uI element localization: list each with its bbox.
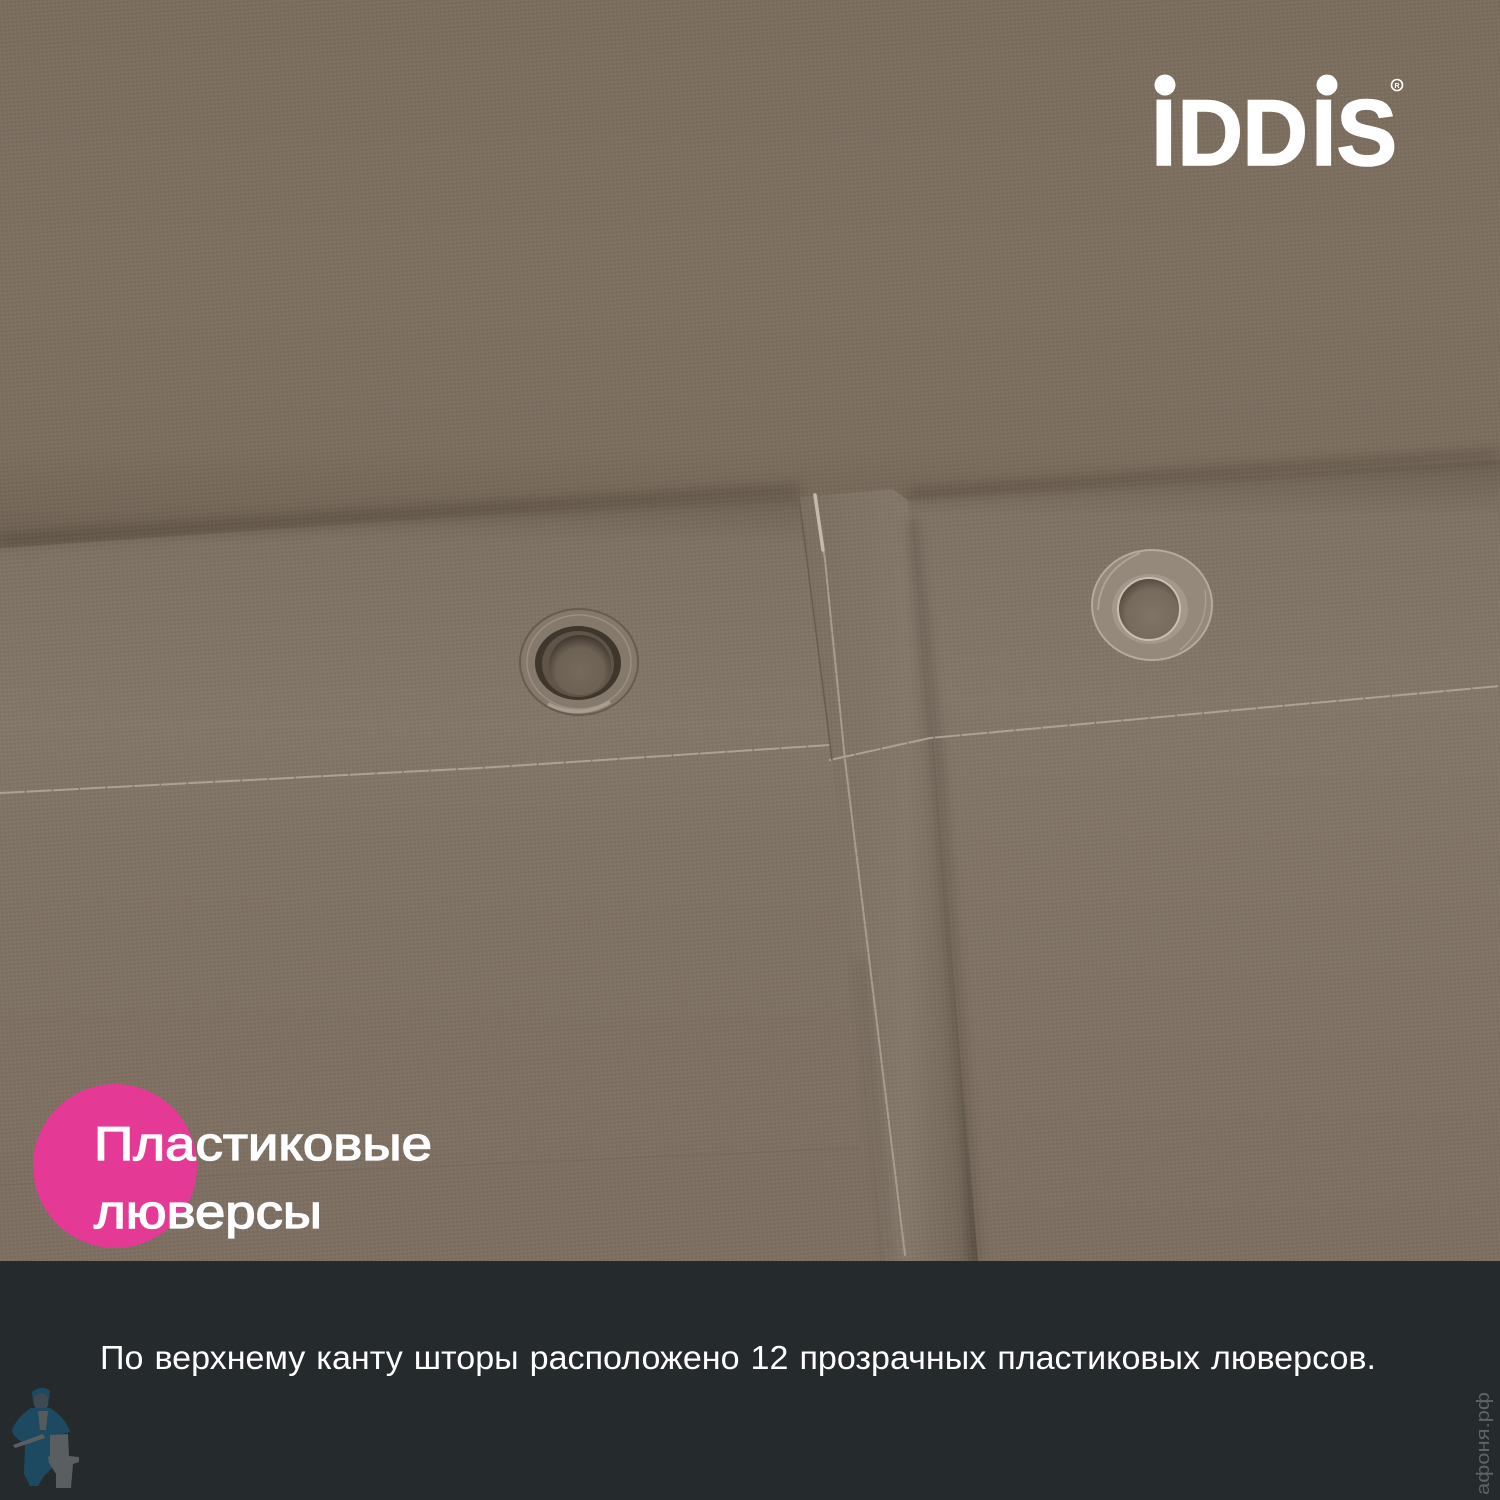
seam stitching (0, 495, 1500, 1255)
panel: dark footer band (0, 1261, 1500, 1500)
logo: IDDIS: IDDIS (1151, 80, 1397, 185)
body text: По верхнему канту шторы расположено 12 прозрачных пластиковых люверсов. (100, 1339, 1376, 1376)
heading (94, 1117, 432, 1238)
icon: plumber with toilet watermark (12, 1388, 79, 1488)
icon: left plastic grommet (520, 609, 638, 715)
pink accent circle (33, 1084, 197, 1248)
vertical seam strip (800, 489, 978, 1262)
watermark site label: афоня.рф (1473, 1392, 1493, 1495)
heading: люверсы (94, 1185, 322, 1238)
upper curtain layer (0, 0, 1500, 560)
right hem panel (905, 460, 1500, 1262)
left hem panel (0, 497, 905, 1262)
icon: right plastic grommet (1092, 550, 1212, 660)
heading: Пластиковые (94, 1117, 432, 1170)
logo: IDDIS: R (1394, 83, 1400, 90)
fold shadows (0, 454, 1500, 1262)
